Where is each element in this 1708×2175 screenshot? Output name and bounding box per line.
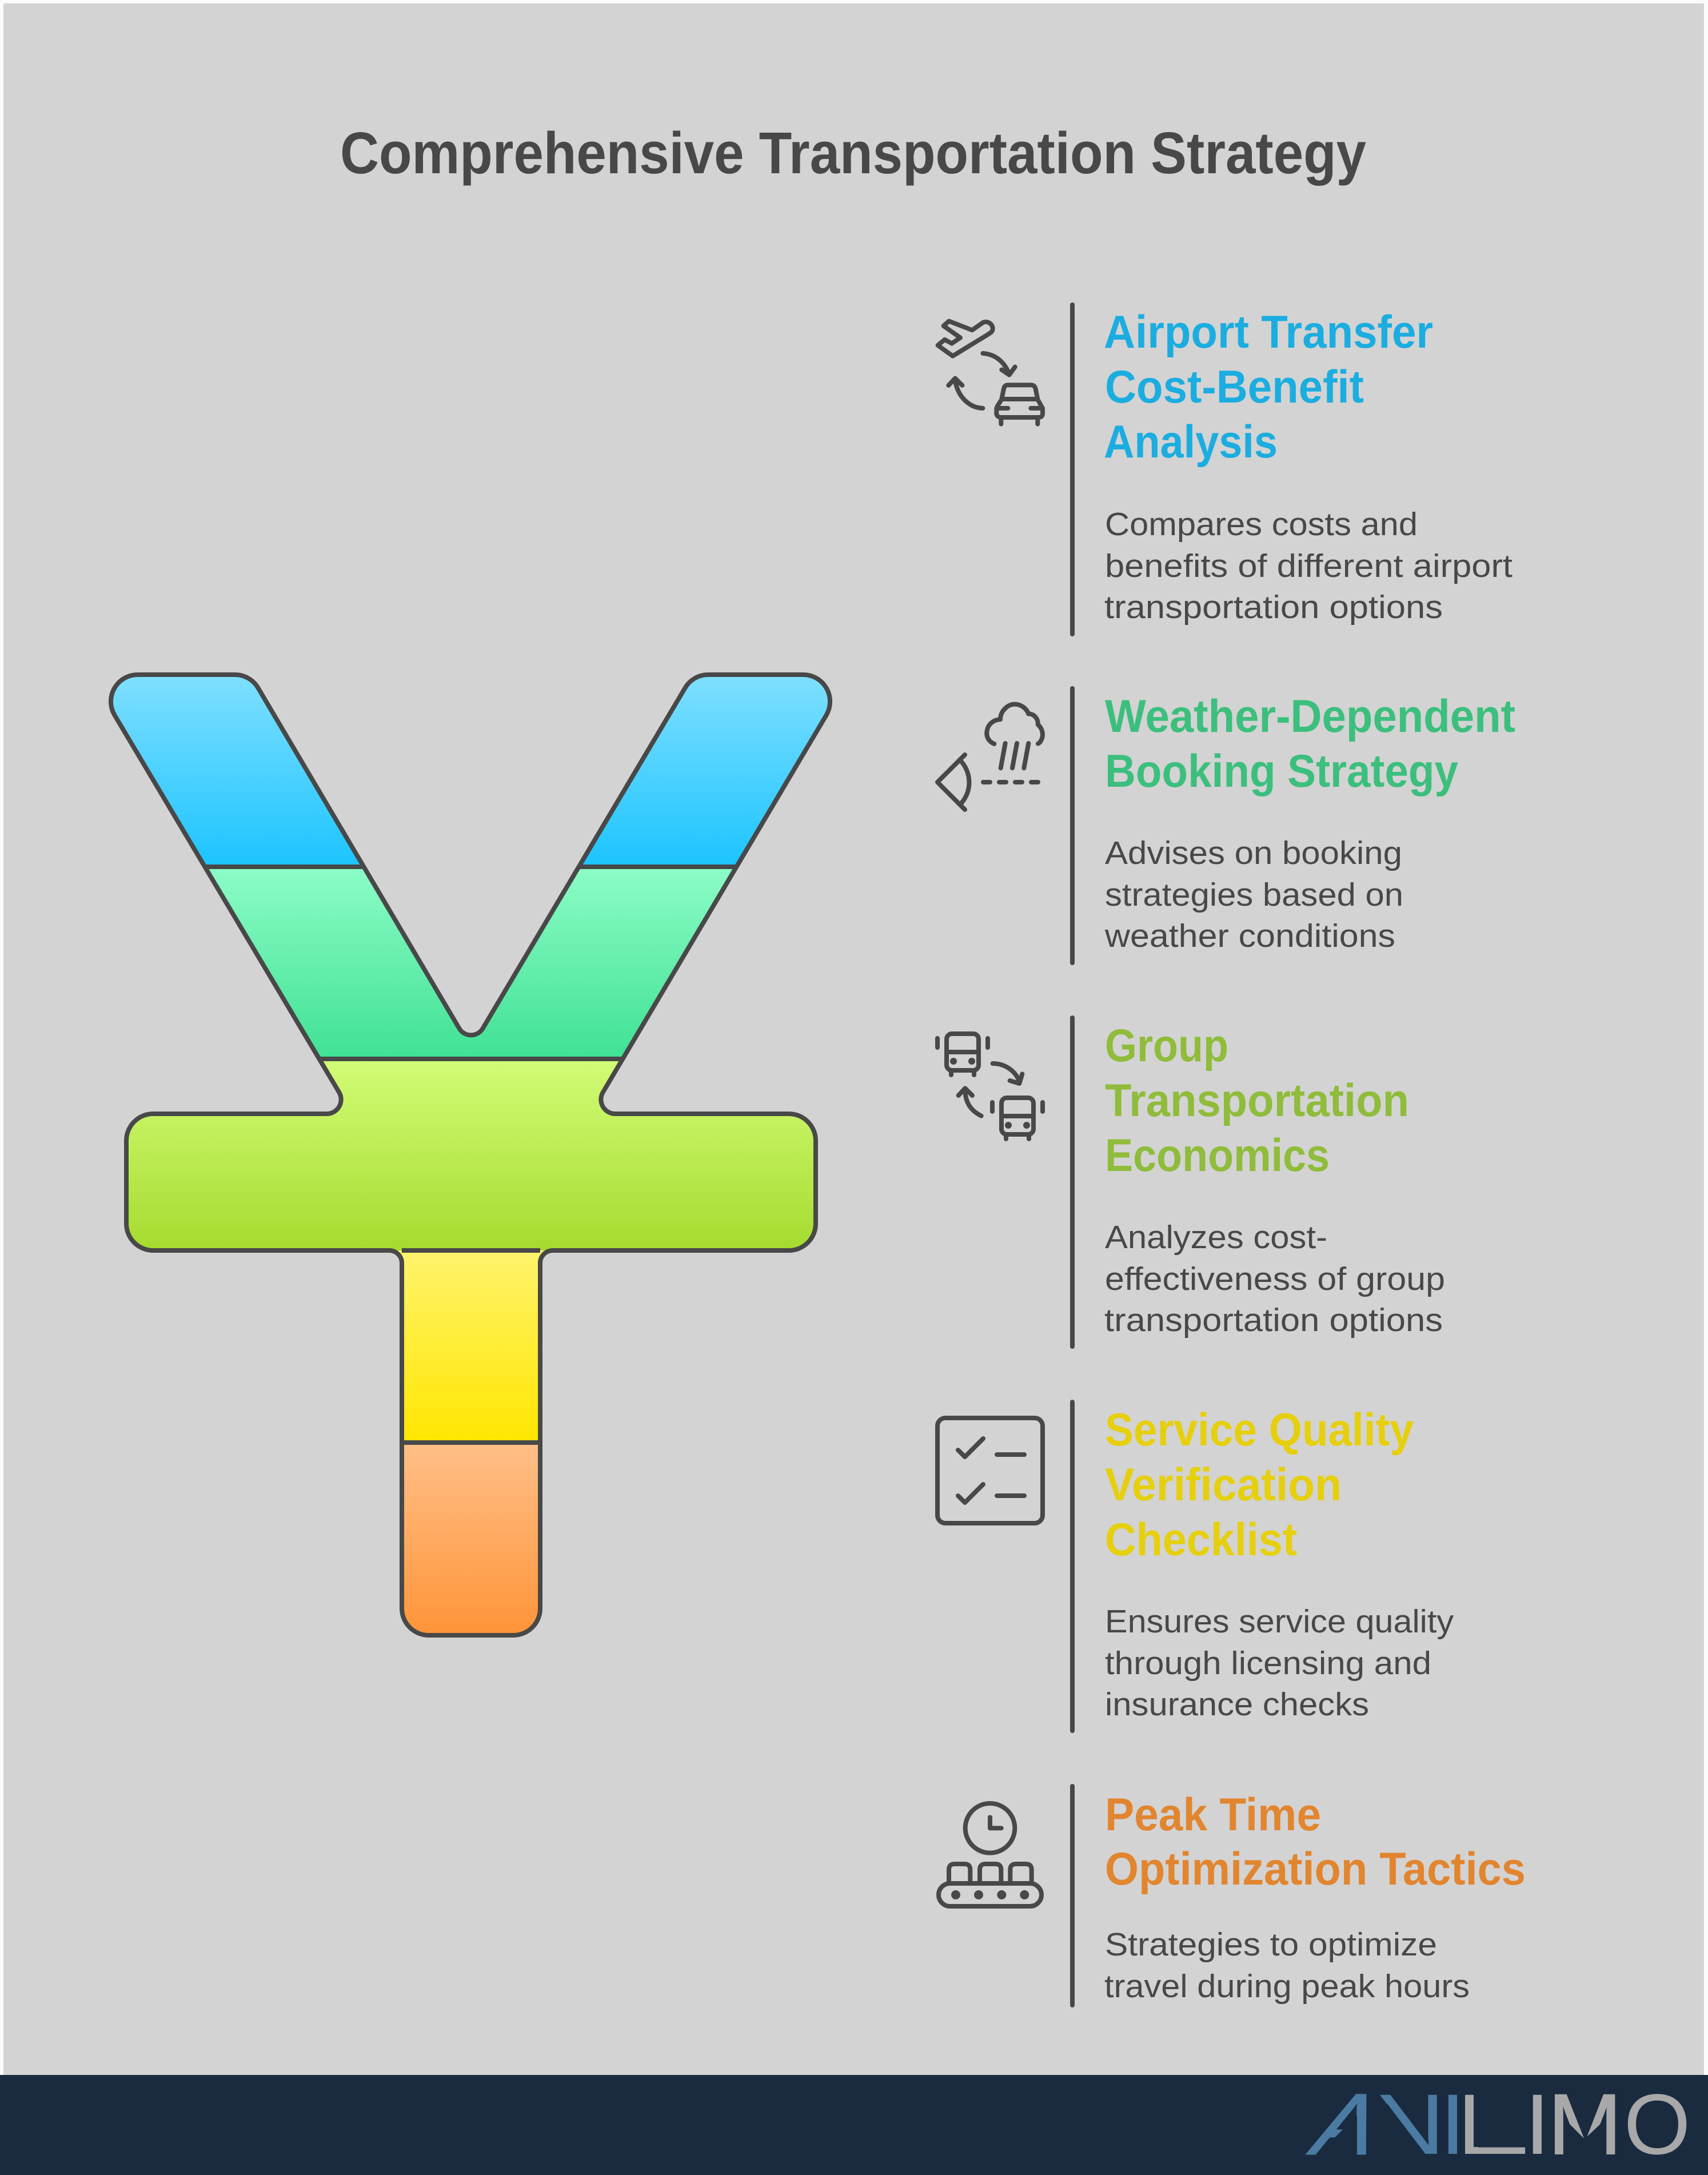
icon: plane and car exchange: [938, 321, 1043, 424]
icon: clock and conveyor: [939, 1803, 1041, 1906]
logo: ANILIMO: M: [1548, 2077, 1622, 2173]
heading: peak time: Optimization Tactics: [1105, 1843, 1526, 1895]
heading: group transportation: Transportation: [1105, 1075, 1409, 1126]
heading: airport transfer: Airport Transfer: [1104, 306, 1433, 358]
description: peak time: travel during peak hours: [1104, 1968, 1470, 2005]
description: weather booking: Advises on booking: [1105, 835, 1402, 871]
description: peak time: [1104, 1926, 1470, 2005]
heading: airport transfer: Cost-Benefit: [1105, 361, 1364, 413]
description: weather booking: weather conditions: [1104, 918, 1395, 954]
heading: service quality: Checklist: [1105, 1514, 1297, 1565]
logo: ANILIMO: A: [1299, 2076, 1398, 2172]
logo: ANILIMO: L: [1454, 2077, 1530, 2172]
segment: blue arms: [109, 669, 833, 867]
description: airport transfer: [1104, 506, 1513, 626]
heading: weather booking: [1105, 691, 1515, 797]
description: service quality: [1105, 1603, 1454, 1723]
description: group transportation: [1104, 1219, 1445, 1339]
description: service quality: insurance checks: [1105, 1686, 1369, 1723]
title: Comprehensive Transportation Strategy: [340, 120, 1366, 186]
logo: ANILIMO: N: [1371, 2077, 1445, 2172]
logo: ANILIMO: I: [1440, 2077, 1466, 2173]
segment: orange stem: [404, 1445, 538, 1633]
icon: weather observer: [937, 704, 1043, 810]
shape outline: [111, 675, 830, 1635]
segment: lime bar: [109, 1059, 833, 1250]
panel: group transportation: [937, 1018, 1445, 1347]
panel: airport transfer: [938, 305, 1513, 634]
icon: two buses exchange: [937, 1034, 1043, 1139]
description: group transportation: Analyzes cost-: [1105, 1219, 1327, 1256]
heading: airport transfer: Analysis: [1104, 416, 1278, 468]
logo: ANILIMO: O: [1624, 2076, 1690, 2172]
description: service quality: Ensures service quality: [1105, 1603, 1454, 1640]
description: peak time: Strategies to optimize: [1105, 1926, 1437, 1963]
description: group transportation: transportation options: [1104, 1302, 1443, 1339]
description: group transportation: effectiveness of group: [1105, 1261, 1445, 1297]
heading: airport transfer: [1104, 306, 1433, 468]
heading: group transportation: [1105, 1020, 1409, 1181]
heading: peak time: [1105, 1789, 1526, 1895]
footer band: [0, 2075, 1708, 2175]
segment: green arms: [209, 868, 733, 1057]
heading: service quality: Verification: [1105, 1459, 1342, 1511]
icon: checklist: [937, 1418, 1043, 1523]
description: airport transfer: benefits of different airport: [1105, 548, 1513, 584]
panel: weather booking: [937, 688, 1515, 963]
heading: peak time: Peak Time: [1105, 1789, 1321, 1841]
heading: group transportation: Economics: [1105, 1130, 1330, 1181]
heading: weather booking: Weather-Dependent: [1105, 691, 1515, 742]
panel: peak time: [939, 1786, 1526, 2005]
panel: service quality: [937, 1402, 1454, 1731]
heading: service quality: Service Quality: [1105, 1404, 1414, 1456]
segment: yellow stem: [394, 1250, 548, 1443]
heading: service quality: [1105, 1404, 1414, 1565]
description: airport transfer: transportation options: [1104, 589, 1443, 626]
description: service quality: through licensing and: [1105, 1645, 1431, 1682]
chart: layered Y shape funnel: [109, 669, 833, 1640]
description: weather booking: strategies based on: [1105, 877, 1403, 913]
logo: ANILIMO: I: [1525, 2077, 1550, 2173]
heading: group transportation: Group: [1105, 1020, 1228, 1071]
heading: weather booking: Booking Strategy: [1105, 746, 1458, 797]
description: airport transfer: Compares costs and: [1105, 506, 1418, 543]
description: weather booking: [1104, 835, 1403, 954]
logo: ANILIMO: [1299, 2076, 1690, 2173]
